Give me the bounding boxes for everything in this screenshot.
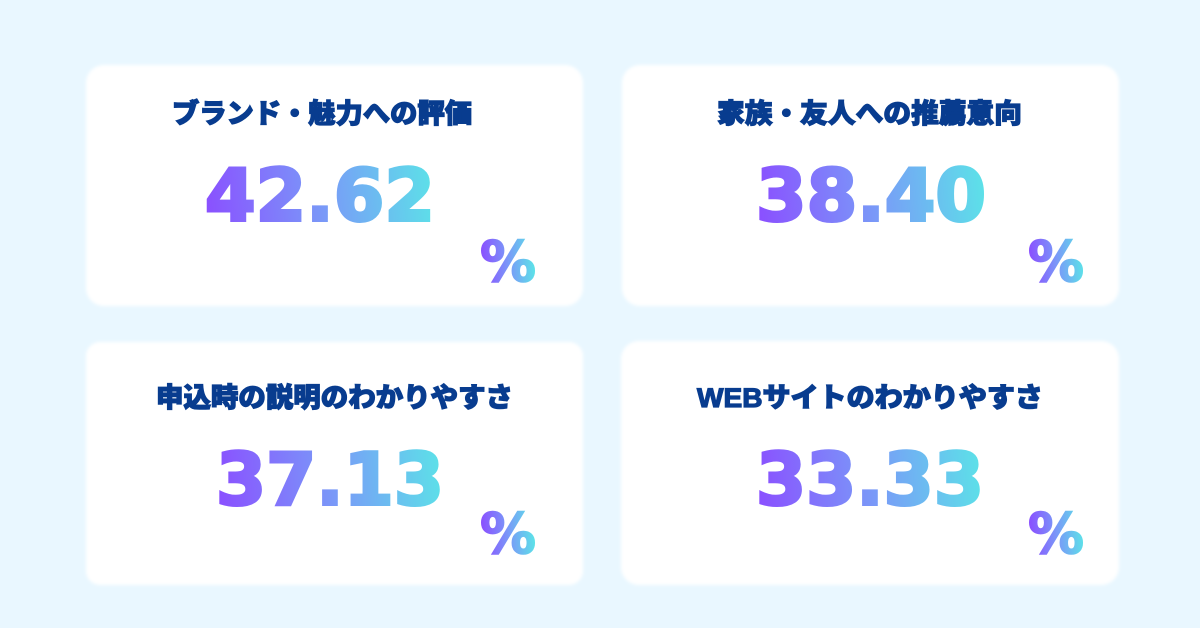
value: 37.13 [216, 438, 444, 522]
percent sign: % [480, 230, 536, 295]
percent sign: % [1028, 502, 1084, 567]
panel: explanation clarity at application [86, 342, 583, 585]
panel: website clarity [621, 341, 1119, 585]
card background [86, 65, 583, 306]
panel: brand appeal rating [86, 65, 583, 306]
value: 42.62 [205, 154, 435, 238]
card background [621, 341, 1119, 585]
card background [622, 65, 1119, 306]
heading: ブランド・魅力への評価 [172, 98, 472, 129]
value: 33.33 [756, 438, 984, 522]
heading: 家族・友人への推薦意向 [717, 99, 1022, 129]
value: 38.40 [756, 154, 986, 238]
heading: WEBサイトのわかりやすさ [697, 383, 1043, 413]
heading: 申込時の説明のわかりやすさ [156, 383, 513, 413]
percent sign: % [480, 502, 536, 567]
card background [86, 342, 583, 585]
panel: recommendation intent [622, 65, 1119, 306]
percent sign: % [1028, 230, 1084, 295]
